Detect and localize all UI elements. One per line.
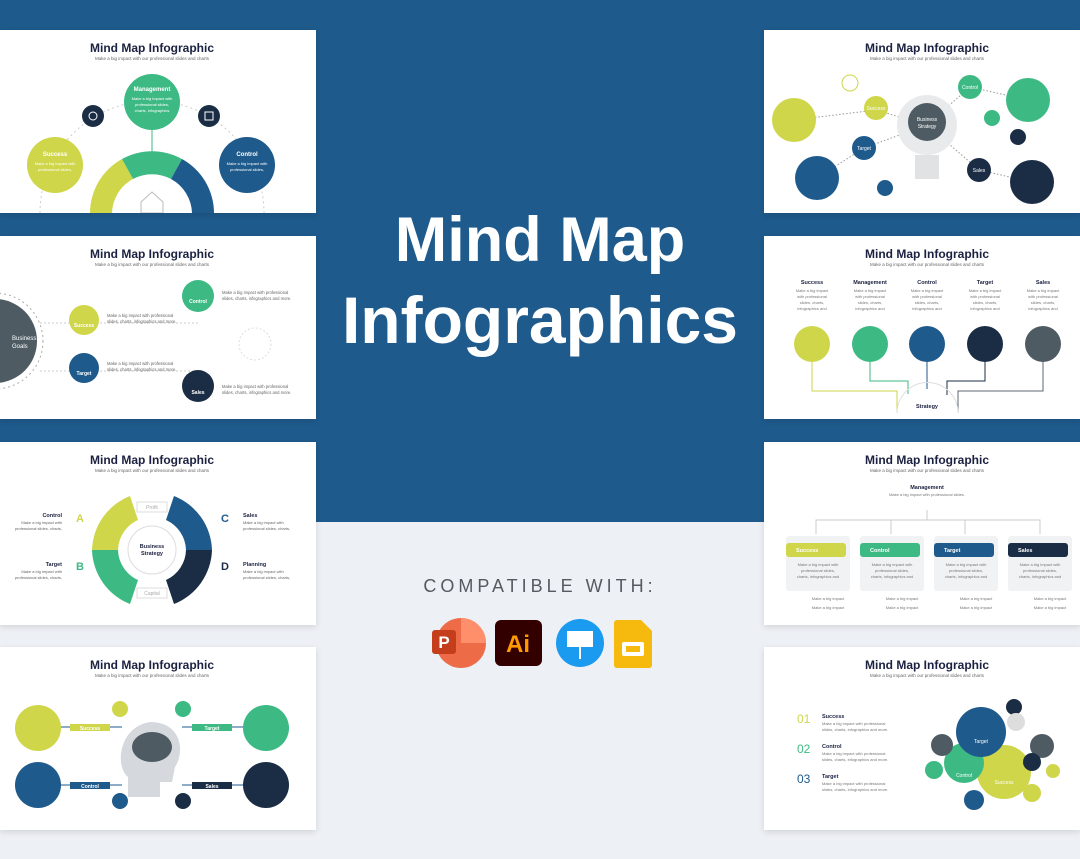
slide: left 3 business strategy: professional slides, charts, (243, 575, 290, 580)
slide: right 2 strategy columns: Make a big impact (854, 288, 887, 293)
slide: right 3 management org: Make a big impact with (798, 562, 838, 567)
slide: right 4 bubble cluster: Target (974, 739, 989, 745)
slide: right 2 strategy columns: slides, charts, (973, 300, 997, 305)
slide: right 2 strategy columns: Management (853, 280, 887, 286)
slide: right 4 bubble cluster: 03 (797, 772, 811, 786)
main title: Infographics (342, 283, 738, 357)
slide: right 2 strategy columns: Success (801, 280, 823, 286)
slide: left 3 business strategy: Make a big impact with (243, 569, 284, 574)
slide: right 1 bulb: Business (917, 117, 938, 123)
slide: right 2 strategy columns: Control (917, 280, 937, 286)
slide: right 1 bulb: Target (857, 146, 872, 152)
slide: right 3 management org: Make a big impact (812, 605, 845, 610)
icon: keynote (556, 619, 604, 667)
slide: right 3 management org: Make a big impact with professional slides. (889, 492, 965, 497)
slide: right 3 management org: Sales (1018, 548, 1032, 554)
slide: left 3 business strategy: Make a big impact with (243, 520, 284, 525)
icon: illustrator (495, 620, 542, 666)
slide: right 4 bubble cluster: Mind Map Infographic (865, 658, 989, 672)
slide: right 3 management org: Make a big impact with (1020, 562, 1060, 567)
blue background band (0, 0, 1080, 522)
slide: right 4 bubble cluster: Control (822, 744, 842, 750)
slide: right 3 management org: charts, infographics and (1019, 574, 1061, 579)
slide: right 2 strategy columns: with professional (912, 294, 942, 299)
slide: right 2 strategy columns: slides, charts, (1031, 300, 1055, 305)
slide: left 1 semicircle: Make a big impact with our professional slides and charts (95, 56, 210, 61)
slide: right 2 strategy columns: infographics and (912, 306, 942, 311)
slide: right 4 bubble cluster: Make a big impact with our professional slides and charts (870, 673, 985, 678)
slide: right 3 management org: Target (944, 548, 961, 554)
slide: left 2 business goals: slides, charts, infographics and more. (107, 319, 176, 324)
slide: right 4 bubble cluster: Make a big impact with professional (822, 721, 885, 726)
slide: right 2 strategy columns: Make a big impact (796, 288, 829, 293)
slide: right 2 strategy columns: Sales (1036, 280, 1050, 286)
slide: left 1 semicircle: Make a big impact with (35, 161, 75, 166)
slide: left 2 business goals: slides, charts, infographics and more. (107, 367, 176, 372)
compatible with heading: COMPATIBLE WITH: (423, 576, 657, 596)
slide: right 2 strategy columns: Mind Map Infographic (865, 247, 989, 261)
slide: right 2 strategy columns: infographics and (797, 306, 827, 311)
slide: left 4 head: Success (80, 726, 100, 732)
slide: right 4 bubble cluster: 01 (797, 712, 811, 726)
slide: right 3 management org: professional slides, (1023, 568, 1057, 573)
slide: left 2 business goals: Make a big impact with our professional slides and charts (95, 262, 210, 267)
slide: right 3 management org: Control (870, 548, 890, 554)
slide: right 3 management org: professional slides, (801, 568, 835, 573)
slide: left 1 semicircle: Make a big impact with (227, 161, 267, 166)
slide: left 3 business strategy: Control (42, 513, 62, 519)
slide: left 3 business strategy: professional slides, charts, (15, 575, 62, 580)
slide: left 3 business strategy: Sales (243, 513, 257, 519)
slide: left 3 business strategy: Planning (243, 562, 266, 568)
icon: powerpoint (432, 618, 486, 668)
slide: right 1 bulb: Sales (973, 168, 986, 174)
slide: right 3 management org: Make a big impact (886, 605, 919, 610)
slide: right 2 strategy columns: Target (977, 280, 993, 286)
slide: right 4 bubble cluster: Make a big impact with professional (822, 751, 885, 756)
icon: powerpoint: P (438, 633, 450, 652)
slide: right 3 management org: Make a big impact (886, 596, 919, 601)
slide: left 3 business strategy (0, 442, 316, 625)
slide: left 1 semicircle: Mind Map Infographic (90, 41, 214, 55)
slide: right 3 management org: Mind Map Infographic (865, 453, 989, 467)
slide: left 4 head: Mind Map Infographic (90, 658, 214, 672)
slide: left 2 business goals: Sales (191, 390, 205, 396)
slide: left 1 semicircle: professional slides, (135, 102, 169, 107)
icon: google slides (614, 620, 652, 668)
slide: right 4 bubble cluster: slides, charts, infographics and more. (822, 787, 888, 792)
slide: left 3 business strategy: professional slides, charts, (243, 526, 290, 531)
slide: left 4 head: Sales (205, 784, 219, 790)
slide: left 1 semicircle: charts, infographics (135, 108, 169, 113)
slide: right 4 bubble cluster: Success (822, 714, 844, 720)
slide: left 2 business goals: slides, charts, infographics and more. (222, 296, 291, 301)
slide: left 3 business strategy: C (221, 513, 229, 525)
slide: right 3 management org: Make a big impact (1034, 596, 1067, 601)
slide: left 2 business goals (0, 236, 316, 419)
slide: left 1 semicircle: Control (236, 152, 258, 158)
slide: left 3 business strategy: Make a big impact with (21, 520, 62, 525)
slide: right 3 management org: Make a big impact (960, 596, 993, 601)
slide: right 4 bubble cluster: slides, charts, infographics and more. (822, 757, 888, 762)
slide: left 3 business strategy: Profit (146, 505, 158, 511)
slide: right 2 strategy columns: with professional (855, 294, 885, 299)
slide: left 2 business goals: Mind Map Infographic (90, 247, 214, 261)
slide: left 2 business goals: Make a big impact with professional (107, 361, 173, 366)
slide: right 4 bubble cluster: Success (995, 780, 1014, 786)
slide: left 2 business goals: Make a big impact with professional (107, 313, 173, 318)
slide: left 2 business goals: Make a big impact with professional (222, 290, 288, 295)
slide: left 1 semicircle: Management (134, 87, 170, 93)
slide: right 2 strategy columns: slides, charts, (800, 300, 824, 305)
slide: left 3 business strategy: Mind Map Infographic (90, 453, 214, 467)
slide: right 2 strategy columns: slides, charts, (915, 300, 939, 305)
slide: left 4 head (0, 647, 316, 830)
slide: left 3 business strategy: D (221, 561, 229, 573)
slide: right 4 bubble cluster: Control (956, 773, 972, 779)
slide: left 3 business strategy: Business (140, 544, 164, 550)
slide: left 1 semicircle (0, 30, 316, 213)
slide: left 3 business strategy: Strategy (141, 551, 164, 557)
slide: left 4 head: Target (205, 726, 220, 732)
slide: left 2 business goals: Control (189, 299, 207, 305)
slide: right 3 management org: Make a big impact with (872, 562, 912, 567)
slide: right 2 strategy columns: Make a big impact (969, 288, 1002, 293)
slide: right 3 management org: Make a big impact (812, 596, 845, 601)
icon: illustrator: Ai (506, 631, 530, 658)
slide: right 1 bulb: Mind Map Infographic (865, 41, 989, 55)
slide: right 2 strategy columns (764, 236, 1080, 419)
slide: left 1 semicircle: professional slides, (230, 167, 264, 172)
slide: right 2 strategy columns: Make a big impact (911, 288, 944, 293)
slide: right 2 strategy columns: slides, charts, (858, 300, 882, 305)
slide: left 2 business goals: Target (77, 371, 92, 377)
slide: left 2 business goals: Business (12, 336, 36, 342)
slide: right 2 strategy columns: infographics and (855, 306, 885, 311)
slide: left 3 business strategy: A (76, 513, 84, 525)
slide: right 1 bulb (764, 30, 1080, 213)
slide: right 1 bulb: Control (962, 85, 978, 91)
slide: right 3 management org: Make a big impact (1034, 605, 1067, 610)
slide: right 4 bubble cluster (764, 647, 1080, 830)
slide: right 3 management org: Make a big impact with our professional slides and charts (870, 468, 985, 473)
slide: right 3 management org: professional slides, (949, 568, 983, 573)
app icons (432, 618, 652, 668)
slide: right 2 strategy columns: infographics and (970, 306, 1000, 311)
slide: right 4 bubble cluster: Make a big impact with professional (822, 781, 885, 786)
slide: right 3 management org: charts, infographics and (797, 574, 839, 579)
slide: right 2 strategy columns: with professional (797, 294, 827, 299)
slide: left 2 business goals: Success (74, 323, 94, 329)
slide: right 4 bubble cluster: 02 (797, 742, 811, 756)
slide: right 3 management org: professional slides, (875, 568, 909, 573)
main title: Mind Map (395, 205, 685, 275)
slide: right 4 bubble cluster: Target (822, 774, 839, 780)
slide: left 3 business strategy: Capital (144, 591, 160, 597)
slide: right 1 bulb: Success (867, 106, 886, 112)
main title (342, 205, 738, 357)
slide: right 3 management org: charts, infographics and (945, 574, 987, 579)
slide: right 4 bubble cluster: slides, charts, infographics and more. (822, 727, 888, 732)
slide: right 2 strategy columns: Make a big impact with our professional slides and charts (870, 262, 985, 267)
slide: left 3 business strategy: B (76, 561, 84, 573)
slide: left 1 semicircle: Success (43, 152, 68, 158)
slide: right 3 management org: Make a big impact with (946, 562, 986, 567)
slide: left 2 business goals: slides, charts, infographics and more. (222, 390, 291, 395)
slide: left 1 semicircle: professional slides, (38, 167, 72, 172)
slide: right 2 strategy columns: infographics and (1028, 306, 1058, 311)
slide: left 4 head: Make a big impact with our professional slides and charts (95, 673, 210, 678)
slide: left 3 business strategy: professional slides, charts, (15, 526, 62, 531)
slide: right 2 strategy columns: with professional (1028, 294, 1058, 299)
slide: left 2 business goals: Make a big impact with professional (222, 384, 288, 389)
slide: left 4 head: Control (81, 784, 99, 790)
slide: left 1 semicircle: Make a big impact with (132, 96, 172, 101)
slide: right 3 management org (764, 442, 1080, 625)
slide: left 3 business strategy: Make a big impact with our professional slides and charts (95, 468, 210, 473)
slide: left 2 business goals: Goals (12, 344, 28, 350)
slide: right 1 bulb: Make a big impact with our professional slides and charts (870, 56, 985, 61)
slide: left 3 business strategy: Target (46, 562, 62, 568)
slide: right 2 strategy columns: Make a big impact (1027, 288, 1060, 293)
slide: right 3 management org: Make a big impact (960, 605, 993, 610)
slide: right 3 management org: Success (796, 548, 818, 554)
slide: right 3 management org: charts, infographics and (871, 574, 913, 579)
slide: left 3 business strategy: Make a big impact with (21, 569, 62, 574)
slide: right 3 management org: Management (910, 485, 944, 491)
slide: right 2 strategy columns: with professional (970, 294, 1000, 299)
slide: right 1 bulb: Strategy (918, 124, 937, 130)
slide: right 2 strategy columns: Strategy (916, 404, 939, 410)
